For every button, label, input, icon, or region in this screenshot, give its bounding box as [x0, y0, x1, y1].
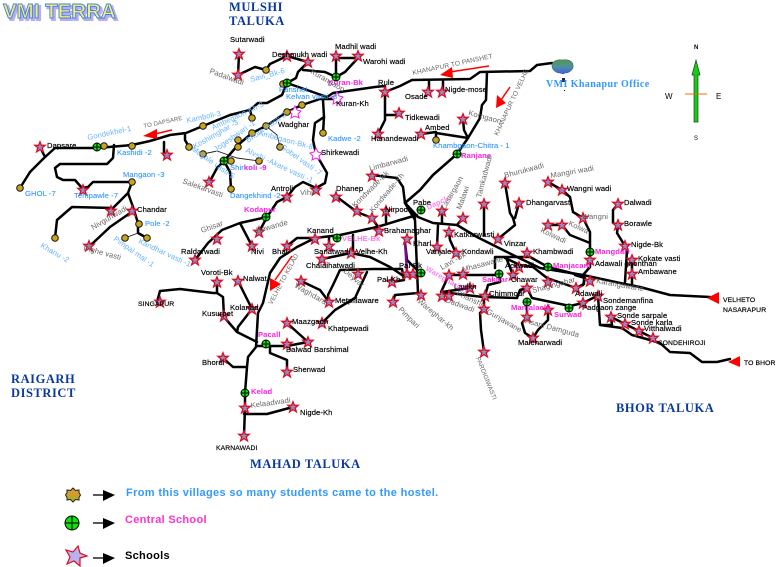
village labels: VELHETO [723, 297, 755, 304]
village labels: Sutarwadi [230, 35, 265, 44]
village labels: Pal-Bk [399, 261, 422, 270]
village labels: Khatpewadi [328, 324, 369, 333]
blue student village labels: Dangekhind -2 [230, 191, 281, 200]
rotated grey place and road labels: Padalwadi [208, 66, 245, 87]
village labels: Raldarwadi [181, 247, 220, 256]
rotated blue labels: Alvshi -Akare vasti -1 [244, 146, 315, 185]
rotated grey place and road labels: Wangni [582, 212, 608, 221]
rotated grey place and road labels: Kolwa [567, 219, 591, 236]
village labels: Deshmukh wadi [272, 50, 328, 59]
village labels: Osade [405, 92, 428, 101]
village labels: Nigde-Kh [300, 408, 332, 417]
rotated grey place and road labels: Bewande [255, 218, 289, 235]
rotated grey place and road labels: KHANAPUR TO VELHE [493, 68, 531, 137]
title: VMI TERRA [5, 2, 118, 25]
village labels: Sonde karla [631, 318, 673, 327]
rotated grey place and road labels: Dighe vasti [82, 243, 122, 262]
rotated grey place and road labels: Wareghar-kh [416, 297, 456, 332]
rotated blue labels: Gondekhel-1 [87, 124, 132, 142]
office marker [546, 60, 650, 91]
rotated grey place and road labels: Lasargaon [439, 175, 465, 211]
village labels: Kanand [307, 226, 334, 235]
rotated blue labels: Magale vasti-5 [190, 144, 237, 181]
village labels: NASARAPUR [723, 307, 766, 314]
rotated grey place and road labels: Tamkadwadi [474, 154, 494, 199]
village labels: Bhordi [202, 358, 225, 367]
village labels: Khambwadi [533, 247, 574, 256]
arrow: to Dapsare [143, 129, 172, 139]
compass: W [665, 92, 673, 101]
compass: S [694, 136, 698, 142]
village labels: Shenwad [293, 365, 325, 374]
rotated grey place and road labels: Asani Damguda [524, 316, 581, 339]
magenta central school labels: Kodapur [244, 205, 276, 214]
village labels: Madhil wadi [335, 42, 376, 51]
village labels: Dapsare [47, 141, 76, 150]
magenta central school labels: Pacall [258, 330, 281, 339]
village labels: Shirkewadi [321, 148, 359, 157]
rotated grey place and road labels: Malawi [454, 185, 471, 211]
region headings [11, 0, 714, 471]
village labels: Warohi wadi [363, 57, 406, 66]
rotated blue labels [39, 66, 324, 269]
rotated grey place and road labels: Shagingahar [531, 275, 577, 295]
village labels: Vinzar [504, 239, 526, 248]
village labels: Pal-Kh [377, 275, 400, 284]
rotated grey place and road labels: Kelaadwadi [250, 395, 291, 410]
blue student village labels: Pole -2 [145, 219, 170, 228]
arrow: Velhe to Kelad [270, 256, 292, 291]
village labels: Sondemanfina [603, 296, 654, 305]
office marker: VMI Khanapur Office [546, 79, 650, 90]
rotated blue labels: Koshimghar -3 [192, 118, 240, 151]
rotated grey place and road labels: TO DAPSARE [143, 116, 183, 130]
arrow: to Panshet [440, 66, 489, 78]
region headings: DISTRICT [11, 386, 76, 400]
magenta central school labels: Mangdari [595, 247, 630, 256]
village labels: Ackwadi [505, 261, 534, 270]
village labels: Wangni wadi [567, 184, 612, 193]
blue student village labels: GHOL -7 [25, 189, 56, 198]
village labels: Antroli [271, 184, 293, 193]
rotated blue labels: Kandhar vasti -1 [137, 237, 193, 269]
village labels: Adawali [575, 289, 603, 298]
village labels: Nigde-Bk [631, 240, 663, 249]
legend: student villages: From this villages so many students came to the hostel. [126, 487, 439, 499]
village labels: Dalwadi [624, 198, 652, 207]
village labels: Katkarwasti [454, 230, 495, 239]
village labels: Maleharwadi [518, 338, 562, 347]
rotated grey place and road labels: Mangiri wadi [550, 163, 595, 180]
village labels: Pabe [413, 198, 431, 207]
rotated grey place and road labels: Limbarwadi [368, 154, 409, 173]
rotated grey place and road labels: Kondwade-Kh [368, 171, 406, 214]
village labels: Chawar [511, 275, 538, 284]
road network [20, 54, 730, 435]
rotated grey place and road labels: VELHE TO KELAD [268, 253, 300, 306]
magenta central school labels: Manjacanl [553, 261, 591, 270]
rotated grey place and road labels: Deyvar [342, 267, 367, 290]
compass: N [694, 45, 698, 51]
village labels: Chandar [137, 205, 167, 214]
blue student village labels: Mangaon -3 [123, 170, 165, 179]
magenta central school labels: Ranjane [461, 151, 491, 160]
compass: E [716, 92, 721, 101]
blue student village labels: Kelvan vasti -8 [286, 92, 337, 101]
village labels: Padgaon zange [582, 303, 637, 312]
rotated grey place and road labels: Karangawane [596, 276, 644, 293]
rotated grey place and road labels: Kurangaon [309, 67, 346, 94]
rotated grey place and road labels: Kolwadi [539, 226, 568, 245]
rotated grey place and road labels: Bhurukwadi [503, 161, 545, 180]
blue student village labels: Khambgaon-Chitra - 1 [433, 141, 510, 150]
village labels: Kolanad [230, 303, 259, 312]
rotated grey place and road labels: KHANAPUR TO PANSHET [412, 53, 493, 77]
village labels: Balwad [286, 345, 312, 354]
legend: schools [66, 546, 170, 566]
village labels: Hanandewadi [371, 134, 419, 143]
region headings: TALUKA [229, 14, 285, 28]
village labels: Nalwat [243, 274, 268, 283]
village labels: Tidkewadi [405, 113, 440, 122]
markers: schools [35, 49, 658, 441]
village labels: TO BHOR [744, 360, 776, 367]
village labels: Kokate vasti [638, 254, 681, 263]
blue student village labels: Kadwe -2 [328, 134, 361, 143]
rotated grey place and road labels: Nivgunwadi [90, 204, 129, 232]
village labels: Ambed [425, 123, 450, 132]
arrow: Velheto Nasarapur [707, 292, 719, 304]
village labels: Borawle [624, 219, 652, 228]
village labels: Nivi [251, 247, 264, 256]
village labels: Barshimal [314, 345, 349, 354]
magenta central school labels: VELHE-Bk [342, 234, 381, 243]
rotated grey place and road labels: Pimpari [397, 305, 422, 330]
village labels: Kharl [413, 239, 431, 248]
rotated blue labels: Kamboli-3 [186, 109, 222, 125]
rotated grey place and road labels: Vihir [300, 188, 316, 197]
magenta central school labels: Sakhar [482, 275, 508, 284]
legend: central school [65, 514, 207, 530]
blue student village labels: Shirkoli -9 [230, 163, 267, 172]
magenta central school labels: Manjalachi [511, 303, 551, 312]
village labels: Brahamaghar [384, 226, 431, 235]
village labels: Nirpodi [385, 205, 410, 214]
village labels: Velhe-Kh [356, 247, 388, 256]
rotated blue labels: Ambegaon-Bk-8 [257, 128, 314, 151]
village labels: Vitthalwadi [644, 324, 682, 333]
village labels: Metpillaware [335, 296, 379, 305]
markers: central schools [93, 73, 594, 397]
legend: student villages [66, 487, 439, 502]
rotated blue labels: Bhom-wasti-2 [244, 110, 288, 145]
magenta central school labels: Waregharikh [424, 264, 469, 295]
rotated blue labels: Khanu -2 [39, 241, 71, 265]
blue student village labels: Tempawle -7 [74, 191, 118, 200]
region headings: RAIGARH [11, 372, 75, 386]
magenta central school labels: Kuran-Bk [328, 78, 364, 87]
legend: central school: Central School [125, 514, 207, 526]
arrow: to Bhor [728, 356, 740, 367]
village labels: KARNAWADI [216, 445, 258, 452]
region headings: MAHAD TALUKA [250, 457, 361, 471]
blue student village labels: Kashidi -2 [117, 148, 152, 157]
village labels [47, 35, 776, 452]
legend: schools: Schools [125, 550, 170, 562]
arrow: to Velhe [496, 87, 510, 108]
village labels: SINGAPUR [138, 301, 174, 308]
rotated grey place and road labels: Kondwade-Bk [350, 169, 391, 209]
village labels: Chimmodi [489, 289, 524, 298]
rotated blue labels: Pimpal mal -1 [112, 234, 156, 269]
village labels: Kusurpet [202, 309, 234, 318]
magenta central school labels: Dapcle [425, 193, 452, 212]
rotated grey place and road labels: Mhasawane [461, 254, 504, 274]
village labels: Ambawane [638, 267, 677, 276]
rotated grey place and road labels: Dadwadi [444, 295, 476, 314]
magenta central school labels: Kelad [251, 387, 272, 396]
village labels: SONDEHIROJI [658, 340, 706, 347]
rotated blue labels: Savi_Bk-6 [249, 66, 286, 84]
village labels: Wadghar [278, 120, 310, 129]
region headings: BHOR TALUKA [616, 401, 714, 415]
blue student village labels [25, 85, 510, 228]
village labels: Maazgaon [292, 317, 328, 326]
village labels: Adawali gaonthan [595, 259, 657, 268]
village labels: Dhanep [336, 184, 363, 193]
rotated blue labels: Ambegaon-Kh-3 [210, 100, 265, 132]
rotated grey place and road labels: Waghdara [293, 281, 329, 307]
village labels: Voroti-Bk [201, 268, 233, 277]
village labels: Bhat [272, 247, 289, 256]
rotated blue labels: Gobel vasti -7 [279, 142, 324, 177]
rotated grey place and road labels: Salekarvasti [181, 176, 225, 200]
village labels: Nigde-mose [445, 85, 487, 94]
rotated grey place and road labels: Ghisar [200, 218, 225, 235]
village labels: Kuran-Kh [336, 99, 369, 108]
title: VMI TERRA [3, 0, 116, 23]
rotated grey place and road labels: Phanshi [455, 289, 485, 309]
village labels: Sonde sarpale [617, 311, 667, 320]
village labels: Vanjale [426, 247, 451, 256]
village labels: Rule [378, 78, 394, 87]
rotated grey place and road labels: Gunjawane [485, 307, 524, 334]
region headings: MULSHI [229, 0, 283, 14]
compass [665, 45, 721, 142]
rotated blue labels: Jogeshwari -1 [212, 118, 257, 154]
village labels: Chaiaihatwadi [306, 261, 355, 270]
rotated grey place and road labels [82, 53, 644, 410]
rotated grey place and road labels: Korngaon [467, 108, 502, 126]
village labels: Dhangarvasti [526, 198, 572, 207]
magenta central school labels [244, 78, 630, 396]
magenta central school labels: Surwad [554, 310, 582, 319]
village labels: Sanatwadi [314, 247, 351, 256]
village labels: Kondawli [462, 247, 494, 256]
markers: student villages [17, 67, 439, 241]
rotated grey place and road labels: PARDIGIWASTI [474, 356, 498, 401]
village labels: Lavlkh [454, 282, 477, 291]
rotated grey place and road labels: Lavi -Bk [438, 250, 468, 272]
blue student village labels: Panshet [279, 85, 308, 94]
